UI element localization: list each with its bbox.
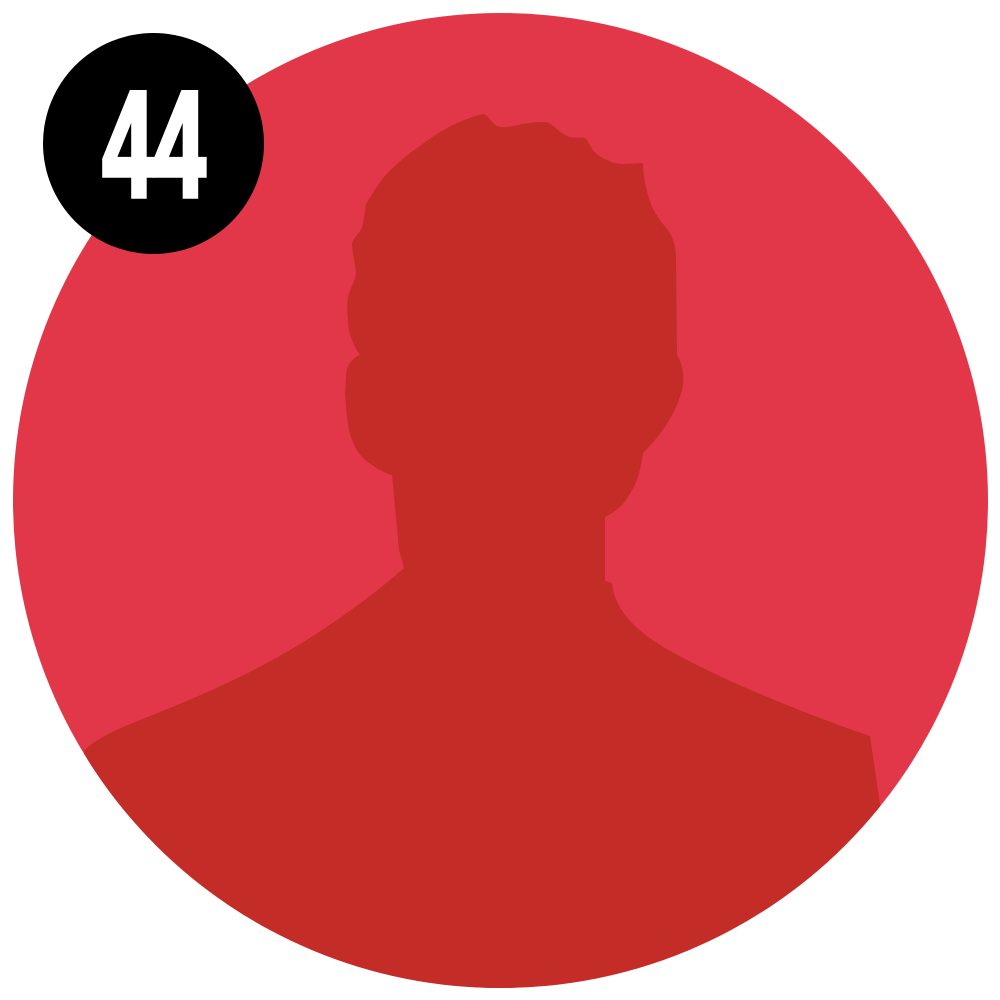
badge circle — [43, 33, 264, 254]
person silhouette — [84, 114, 880, 1000]
badge number: 44 — [102, 60, 206, 228]
number badge — [43, 33, 264, 254]
